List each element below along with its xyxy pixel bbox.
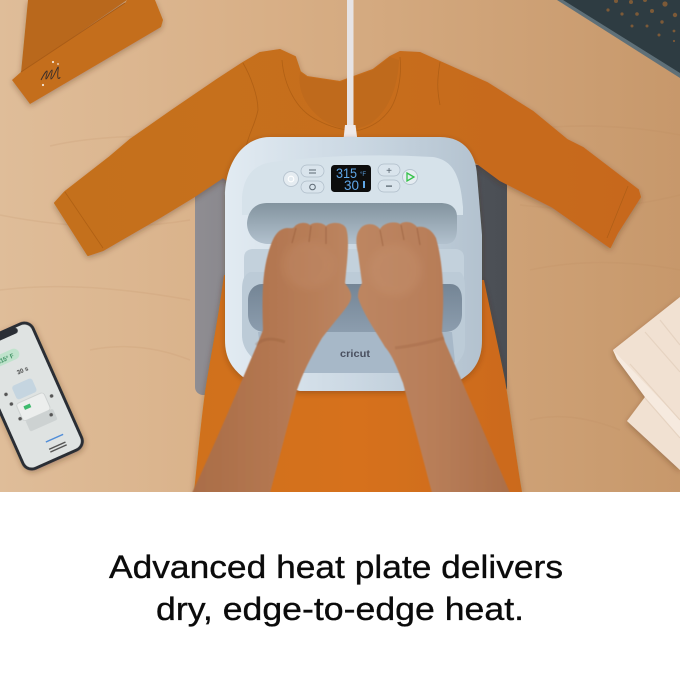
cricut logo: cricut [340, 348, 371, 360]
LCD display: °F [360, 172, 366, 178]
app temperature pill [0, 347, 21, 372]
hat monogram [41, 61, 60, 86]
caption: dry, edge-to-edge heat. [156, 591, 524, 627]
bottom handle recess [248, 284, 462, 332]
heat press mat [195, 165, 507, 395]
orange baby bodysuit [55, 50, 640, 492]
bodysuit torso lower [194, 275, 522, 492]
caption: Advanced heat plate delivers [109, 549, 563, 585]
center handle bar [244, 249, 464, 278]
wood table [0, 0, 680, 492]
heat press body [225, 137, 482, 391]
phone showing app [0, 318, 87, 474]
plus button: + [386, 166, 392, 177]
LCD display: 30 [344, 177, 359, 193]
folded muslin cloth [613, 297, 680, 470]
start button [402, 170, 418, 184]
photo: tabletop scene [0, 0, 680, 493]
bodysuit upper with sleeves [55, 50, 640, 255]
perforated dark tray [557, 0, 680, 78]
left hand and arm [192, 223, 351, 493]
right hand and arm [356, 222, 510, 493]
plus button [378, 164, 400, 177]
top panel [242, 155, 463, 215]
caption [109, 549, 563, 627]
LCD display: 315 [336, 165, 357, 181]
power button [284, 172, 298, 186]
app press illustration [4, 378, 57, 431]
minus button [378, 180, 400, 192]
cricut panel [258, 332, 455, 373]
app timer: 30 s [16, 366, 30, 377]
baby hat [12, 0, 163, 104]
cord and strain relief [344, 0, 358, 137]
neck opening and collar [299, 57, 399, 129]
top handle recess [247, 203, 457, 244]
mode button [301, 165, 324, 177]
shoulder seams [65, 62, 628, 248]
LCD display [331, 165, 371, 193]
lower panel [242, 278, 262, 357]
timer button [301, 181, 324, 193]
